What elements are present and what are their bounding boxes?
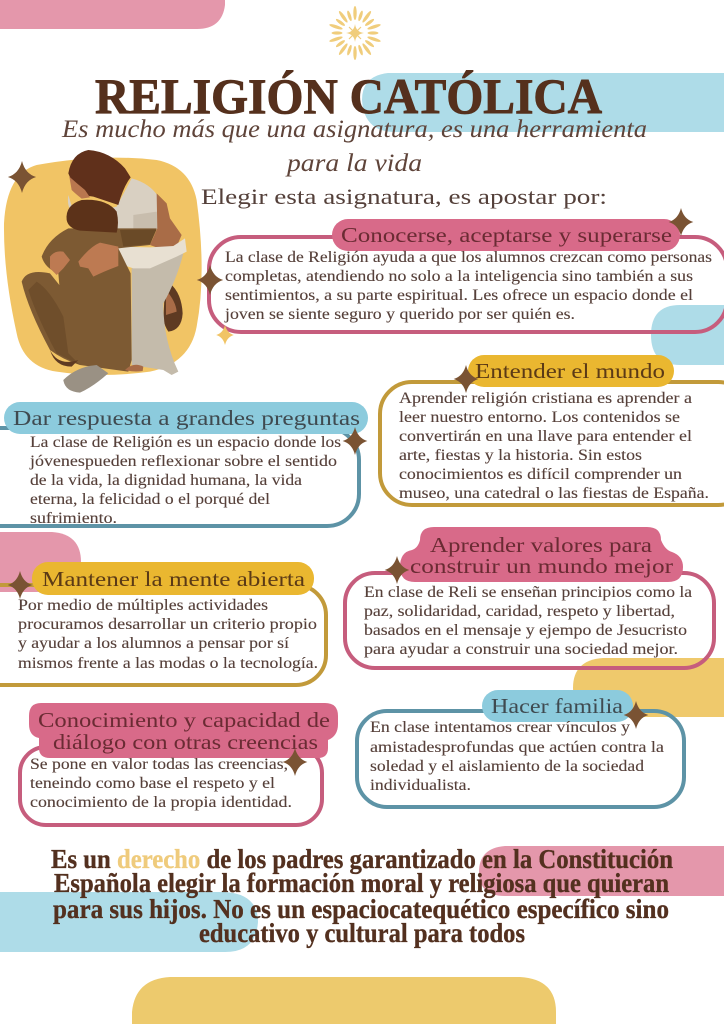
body text: amistadesprofundas que actúen contra la [370, 739, 664, 756]
body text [29, 434, 341, 527]
body text: En clase de Reli se enseñan principios como la [364, 584, 692, 601]
subtitle line one: Es mucho más que una asignatura, es una herramienta [61, 116, 647, 143]
background shape: top blue [362, 73, 724, 132]
heading tag [4, 402, 368, 434]
panel: Hacer familia [357, 690, 684, 807]
card outline [345, 573, 714, 668]
card outline [357, 711, 684, 807]
card outline [0, 585, 326, 685]
background shape: left pink [0, 532, 81, 592]
heading: Conocerse, aceptarse y superarse [341, 223, 672, 247]
subtitle line two: para la vida [285, 150, 422, 177]
closing statement: educativo y cultural para todos [199, 917, 525, 948]
body text: eterna, la felicidad o el porqué del [30, 491, 270, 508]
body text: joven se siente seguro y querido por ser quién es. [224, 306, 575, 323]
background shape: bottom yellow [132, 977, 556, 1024]
body text: de la vida, la dignidad humana, la vida [30, 472, 302, 489]
closing statement: Española elegir la formación moral y religiosa que quieran [54, 867, 669, 898]
body text [224, 249, 712, 323]
body text: leer nuestro entorno. Los contenidos se [399, 409, 680, 426]
heading tag [482, 690, 633, 722]
body text: Se pone en valor todas las creencias, [30, 756, 288, 773]
heading [410, 533, 673, 578]
card outline [0, 428, 359, 526]
heading: Hacer familia [491, 694, 624, 718]
body text: En clase intentamos crear vínculos y [370, 719, 630, 736]
heading tag [468, 355, 674, 387]
title: RELIGIÓN CATÓLICA [95, 68, 602, 124]
heading tag [332, 219, 680, 251]
body text: teneindo como base el respeto y el [30, 775, 275, 792]
heading tag [400, 527, 683, 582]
body text [399, 390, 709, 502]
body text: individualista. [370, 777, 471, 794]
panel: Mantener la mente abierta [0, 562, 326, 685]
panel: Conocerse, aceptarse y superarse [209, 219, 724, 332]
body text: convertirán en una llave para entender el [399, 428, 692, 445]
body text [364, 584, 692, 658]
body text: completas, atendiendo no solo a la inteligencia sino también a sus [225, 268, 693, 285]
body text: procuramos desarrollar un criterio propio [18, 616, 317, 633]
body text: sufrimiento. [30, 510, 117, 527]
body text: jóvenespueden reflexionar sobre el sentido [29, 453, 337, 470]
heading: Conocimiento y capacidad de [38, 708, 330, 732]
body text: y ayudar a los alumnos a pensar por sí [18, 635, 290, 652]
heading: Mantener la mente abierta [42, 567, 306, 591]
body text: arte, fiestas y la historia. Sin estos [399, 447, 642, 464]
body text: La clase de Religión ayuda a que los alumnos crezcan como personas [225, 249, 712, 266]
closing statement: para sus hijos. No es un espaciocatequético específico sino [53, 893, 669, 924]
heading: construir un mundo mejor [410, 554, 673, 578]
card outline [20, 747, 322, 825]
body text: conocimiento de la propia identidad. [30, 794, 292, 811]
body text: conocimientos es difícil comprender un [399, 466, 682, 483]
body text [30, 756, 292, 811]
background shape: right blue [651, 305, 724, 365]
heading: Entender el mundo [475, 359, 665, 383]
body text [370, 719, 664, 794]
icon: golden sunburst [329, 6, 381, 60]
body text: sentimientos, a su parte espiritual. Les ofrece un espacio donde el [225, 287, 693, 304]
body text: paz, solidaridad, caridad, respeto y libertad, [364, 603, 675, 620]
heading tag [29, 703, 338, 758]
background shape: lower left blue [0, 892, 258, 952]
lead-in heading: Elegir esta asignatura, es apostar por: [201, 184, 607, 209]
body text: Aprender religión cristiana es aprender a [399, 390, 692, 407]
heading: Dar respuesta a grandes preguntas [13, 406, 360, 430]
heading [38, 708, 330, 754]
body text [18, 597, 318, 672]
panel: Aprender valores [345, 527, 714, 668]
illustration: embrace on yellow blob [4, 150, 202, 393]
background shape: right yellow [573, 658, 724, 717]
card outline [209, 237, 724, 332]
closing statement [51, 843, 673, 948]
body text: para ayudar a construir una sociedad mejor. [364, 641, 678, 658]
icon: sparkle stars [8, 161, 693, 776]
body text: Por medio de múltiples actividades [18, 597, 268, 614]
closing statement: Es un derecho de los padres garantizado en la Constitución [51, 843, 673, 874]
body text: La clase de Religión es un espacio donde los [30, 434, 341, 451]
heading: diálogo con otras creencias [53, 730, 318, 754]
body text: basados en el mensaje y ejempo de Jesucristo [364, 622, 687, 639]
panel: Entender el mundo [380, 355, 724, 505]
background shape: top pink [0, 0, 225, 29]
heading: Aprender valores para [430, 533, 653, 557]
heading tag [32, 562, 314, 595]
background shape: lower right pink [479, 846, 724, 896]
card outline [380, 382, 724, 505]
panel: Dar respuesta a grandes preguntas [0, 402, 368, 527]
body text: museo, una catedral o las fiestas de España. [399, 485, 709, 502]
body text: soledad y el aislamiento de la sociedad [370, 758, 644, 775]
panel: Conocimiento y diálogo [20, 703, 338, 825]
body text: mismos frente a las modas o la tecnología. [18, 655, 318, 672]
